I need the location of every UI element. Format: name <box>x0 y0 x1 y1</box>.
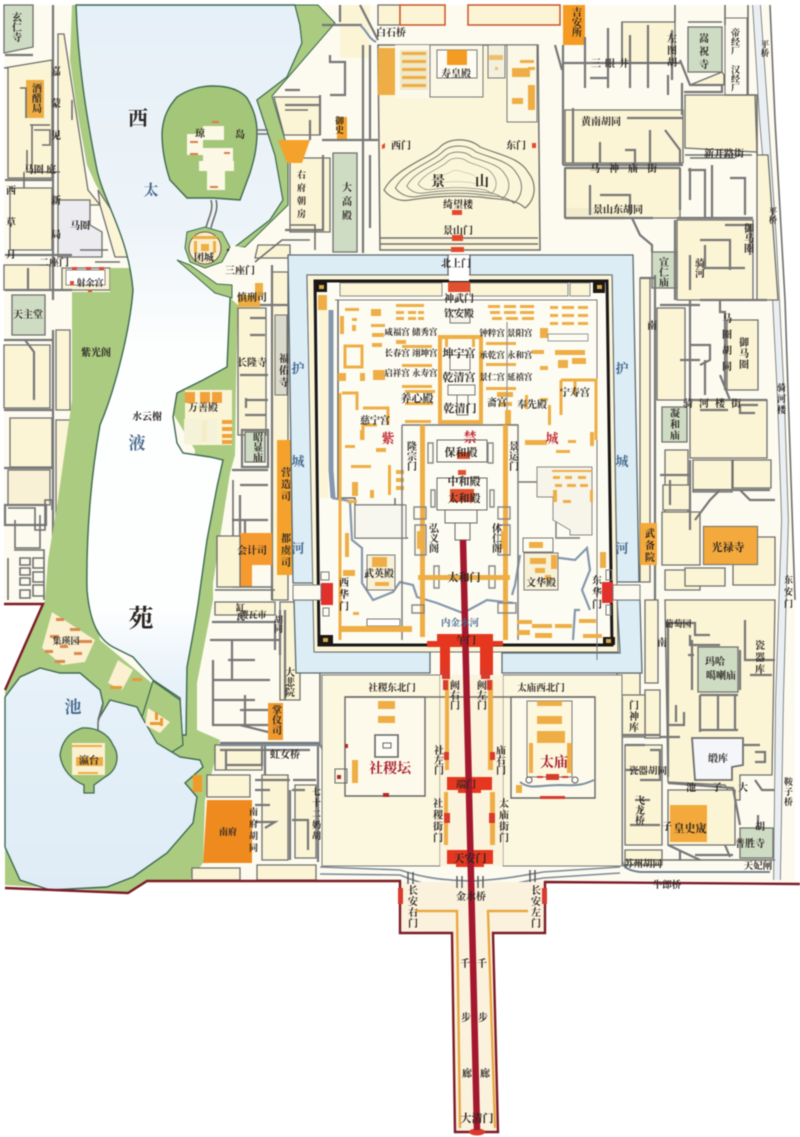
labels: north and west: 寿皇殿 <box>441 67 471 80</box>
palace wall <box>315 281 612 645</box>
south palace precinct <box>322 670 622 867</box>
labels: north and west: 福佑寺 <box>276 352 288 389</box>
labels: north and west: 玄仁寺 <box>10 11 22 42</box>
labels: east quarter: 汉经厂 <box>730 64 740 93</box>
labels: north and west: 御史 <box>334 115 344 135</box>
labels: east quarter: 骑河楼街 <box>683 397 747 410</box>
labels: south precinct: 社稷街门 <box>430 797 442 844</box>
labels: north and west: 马圈 <box>70 219 90 232</box>
labels: north and west: 大高殿 <box>340 181 352 224</box>
west city blocks <box>4 5 128 600</box>
labels: east quarter: 宣仁庙 <box>656 256 668 288</box>
labels: Forbidden City: 隆宗门 <box>404 440 416 472</box>
labels: lakes and moat: 护 <box>615 361 629 376</box>
palace interior <box>315 255 615 680</box>
labels: south precinct: 庙右门 <box>494 744 506 776</box>
labels: lakes and moat: 河 <box>615 541 629 556</box>
labels: south precinct: 端门 <box>456 778 476 791</box>
labels: Forbidden City: 承乾宫 永和宫 <box>479 350 533 360</box>
labels: north and west: 新局 <box>48 194 60 263</box>
labels: lakes and moat: 太 <box>143 182 159 199</box>
canal at Tiananmen <box>320 867 620 888</box>
Jiying garden and Yingtai islands <box>42 612 170 793</box>
labels: lakes and moat: 护 <box>291 361 305 376</box>
labels: Forbidden City: 乾清门 <box>444 401 476 415</box>
labels: south precinct: 太庙街门 <box>496 797 508 844</box>
labels: east quarter: 牛郎桥 <box>653 879 682 891</box>
labels: north and west: 虹女桥 <box>270 748 300 761</box>
labels: south precinct: 大清门 <box>460 1111 494 1125</box>
labels: north and west: 南府 <box>219 826 237 837</box>
labels: north and west: 七十二奶胡 <box>311 787 321 842</box>
labels: east quarter: 飞龙桥 <box>632 795 644 826</box>
green east bank strip and south shore <box>5 296 238 892</box>
labels: south precinct: 社稷坛 <box>369 760 412 777</box>
labels: north and west: 瀛台 <box>79 754 100 767</box>
south-east halls <box>537 467 592 535</box>
labels: Forbidden City: 城 <box>545 431 559 446</box>
labels: east quarter: 马神庙街 <box>590 162 666 175</box>
labels: south precinct: 步 <box>478 1011 488 1024</box>
labels: Forbidden City: 乾清宫 <box>442 370 476 384</box>
labels: east quarter: 左图胡 <box>664 32 676 69</box>
labels: north and west: 会计司 <box>237 544 267 557</box>
labels: Forbidden City: 钟粹宫 景阳宫 <box>479 328 533 338</box>
labels: east quarter: 帝经厂 <box>730 27 740 56</box>
labels: east quarter: 东安门 <box>782 574 793 611</box>
labels: north and west: 景山门 <box>443 224 473 237</box>
labels: north and west: 西草月 <box>4 184 16 281</box>
west and east flower gates <box>321 583 333 605</box>
moat road crossings <box>293 585 640 600</box>
labels: south precinct <box>368 679 568 1125</box>
corridors <box>444 680 495 845</box>
labels: north and west: 白石桥 <box>376 26 406 39</box>
labels: north and west: 绮望楼 <box>443 198 474 211</box>
labels: east quarter: 天妃闸 <box>744 860 773 872</box>
labels: north and west: 缸瓦 <box>235 602 245 622</box>
central axis north <box>450 310 470 323</box>
labels: Forbidden City: 西华门 <box>336 576 348 613</box>
labels: east quarter: 光禄寺 <box>712 540 744 554</box>
labels: north and west: 长隆寺 <box>237 356 267 369</box>
labels: Forbidden City: 启祥宫 永寿宫 <box>384 368 438 378</box>
labels: Forbidden City: 咸福宫 储秀宫 <box>384 327 438 337</box>
labels: south precinct: 廊 <box>462 1067 472 1080</box>
labels: east quarter: 葡萄园 <box>664 618 692 629</box>
labels: east quarter: 骑河楼 <box>776 382 786 416</box>
labels: east quarter: 武备院 <box>642 527 654 564</box>
west-of-moat blocks north <box>215 5 378 600</box>
labels: Forbidden City: 养心殿 <box>400 391 434 405</box>
labels: north and west: 缨瓦市 <box>239 609 267 620</box>
labels: east quarter: 南 <box>657 636 667 649</box>
labels: east quarter: 子 <box>662 821 672 833</box>
south-west blocks <box>192 602 323 880</box>
labels: north and west: 琼 <box>195 127 206 140</box>
labels: Forbidden City: 坤宁宫 <box>442 346 476 360</box>
labels: north and west: 天主堂 <box>13 308 43 321</box>
labels: Forbidden City: 东华门 <box>590 574 602 611</box>
Duan gate <box>447 777 492 793</box>
labels: north and west: 酒醋局 <box>30 82 42 114</box>
east city quarter <box>555 5 795 880</box>
labels: east quarter: 吉安所 <box>570 6 582 38</box>
green west bank main <box>5 268 185 750</box>
Wuying hall <box>367 555 395 590</box>
labels: north and west <box>4 11 526 855</box>
river <box>332 498 513 613</box>
labels: Forbidden City: 中和殿 <box>448 474 480 488</box>
labels: Forbidden City: 内金水河 <box>441 617 479 629</box>
labels: north and west: 营造司 <box>278 466 290 503</box>
labels: north and west: 万善殿 <box>188 401 218 414</box>
moat lower half <box>294 600 642 673</box>
labels: Forbidden City: 斋宫 <box>487 396 507 409</box>
labels: east quarter: 鞍子桥 <box>782 776 793 807</box>
labels: east quarter: 池子大 <box>686 781 764 794</box>
Wanshan hall compound <box>184 390 232 445</box>
labels: Forbidden City: 奉先殿 <box>517 398 547 411</box>
labels: Forbidden City: 神武门 <box>444 292 474 305</box>
labels: east quarter: 噶喇庙 <box>706 669 736 682</box>
labels: Forbidden City: 午门 <box>456 634 476 647</box>
labels: north and west: 西门 <box>391 139 411 152</box>
south lake (Nanhai) <box>5 668 203 890</box>
labels: north and west: 紫光阁 <box>81 346 111 359</box>
labels: east quarter: 御马圈 <box>742 222 754 254</box>
labels: north and west: 北上门 <box>441 257 471 270</box>
labels: Forbidden City: 景运门 <box>506 440 518 472</box>
labels: east quarter: 黄南胡同 <box>581 115 621 128</box>
labels: east quarter: 胡 <box>755 820 765 833</box>
labels: east quarter: 三眼井 <box>591 57 633 70</box>
labels: south precinct: 长安右门 <box>406 884 418 929</box>
labels: east quarter: 玛哈 <box>705 655 725 668</box>
labels: south precinct: 社稷东北门 <box>368 682 416 694</box>
labels: Forbidden City: 武英殿 <box>364 567 394 580</box>
islet in south lake bridge <box>142 681 183 752</box>
labels: east quarter: 缎库 <box>708 752 728 765</box>
labels: Forbidden City: 太和殿 <box>448 491 480 505</box>
labels: north and west: 三座门 <box>225 264 255 277</box>
Taimiao temple <box>511 697 595 798</box>
labels: south precinct: 廊 <box>480 1067 490 1080</box>
Jingshan park <box>378 45 540 252</box>
east bank green <box>235 5 335 247</box>
labels: lakes and moat <box>64 107 629 717</box>
labels: Forbidden City <box>336 292 602 647</box>
labels: north and west: 掌仪司 <box>270 704 282 735</box>
labels: lakes and moat: 苑 <box>128 605 154 633</box>
labels: east quarter: 普胜寺 <box>735 837 765 850</box>
labels: south precinct: 金水桥 <box>456 890 486 903</box>
palace inner ground <box>307 275 618 652</box>
upper lake (Taiye) <box>76 5 302 735</box>
labels: south precinct: 天安门 <box>454 851 486 865</box>
south-east quarter <box>617 600 775 872</box>
green west bank north strip <box>70 5 137 292</box>
meridian gate <box>427 634 503 680</box>
labels: east quarter: 皇史宬 <box>674 821 706 835</box>
labels: east quarter: 景山东胡同 <box>593 203 643 216</box>
labels: south precinct: 长安左门 <box>528 884 540 929</box>
labels: east quarter: 瓷器胡同 <box>629 765 667 777</box>
Wenhua hall <box>523 538 553 552</box>
labels: north and west: 射余宫 <box>76 277 104 288</box>
labels: lakes and moat: 池 <box>64 697 82 717</box>
labels: south precinct: 太庙西北门 <box>517 682 565 694</box>
south wall and T-shaped avenue <box>4 604 800 1136</box>
labels: east quarter: 南 <box>644 319 656 331</box>
labels: Forbidden City: 保和殿 <box>444 445 478 459</box>
labels: south precinct: 千 <box>477 957 487 970</box>
labels: north and west: 水云榭 <box>132 410 162 423</box>
Tuancheng peninsula <box>177 227 262 298</box>
labels: Forbidden City: 太和门 <box>448 570 480 584</box>
labels: north and west: 山 <box>475 174 489 190</box>
imperial axis road <box>463 540 477 1130</box>
Qiong island <box>162 86 268 228</box>
labels: north and west: 南府胡同 <box>248 806 258 855</box>
orange buildings north-east <box>486 305 594 453</box>
north walls top blocks <box>378 5 585 45</box>
labels: south precinct: 社左门 <box>432 744 444 776</box>
east canal <box>753 5 795 880</box>
labels: north and west: 慎刑司 <box>237 291 267 304</box>
labels: east quarter: 骑河 <box>692 257 704 279</box>
labels: north and west: 马圈 庭 <box>24 163 56 176</box>
labels: lakes and moat: 液 <box>128 434 146 453</box>
labels: Forbidden City: 弘义阁 <box>426 523 438 554</box>
three great halls court <box>402 425 580 640</box>
labels: south precinct: 步 <box>461 1011 471 1024</box>
labels: north and west: 景 <box>431 174 446 190</box>
orange buildings north-west <box>338 304 435 423</box>
Tiananmen <box>447 850 493 867</box>
labels: east quarter <box>570 6 793 891</box>
labels: Forbidden City: 长春宫 翊坤宫 <box>384 348 438 358</box>
labels: Forbidden City: 慈宁宫 <box>360 414 390 427</box>
labels: Forbidden City: 景仁宫 延禧宫 <box>479 372 533 382</box>
labels: east quarter: 凝和庙 <box>668 407 680 441</box>
labels: east quarter: 新开路街 <box>704 147 744 160</box>
labels: east quarter: 马圈胡同 <box>720 312 732 377</box>
labels: north and west: 昭显庙 <box>250 432 262 463</box>
labels: north and west: 二座门 <box>39 256 69 269</box>
labels: Forbidden City: 体仁阁 <box>490 522 502 554</box>
labels: north and west: 团城 <box>194 251 214 264</box>
labels: east quarter: 苏州胡同 <box>624 858 662 870</box>
labels: lakes and moat: 河 <box>291 541 305 556</box>
Forbidden City moat <box>288 255 639 583</box>
labels: south precinct: 阙左门 <box>474 679 486 711</box>
labels: Forbidden City: 紫 <box>381 431 395 446</box>
labels: east quarter: 嵩祝寺 <box>696 32 708 72</box>
labels: Forbidden City: 文华殿 <box>526 576 556 589</box>
labels: east quarter: 瓷器库 <box>752 639 764 676</box>
labels: south precinct: 千 <box>460 957 470 970</box>
labels: north and west: 岛 <box>235 128 245 141</box>
bridge gates <box>408 870 535 888</box>
labels: north and west: 右府朝房 <box>296 169 306 222</box>
labels: lakes and moat: 城 <box>615 454 629 469</box>
land base <box>4 5 795 893</box>
labels: north and west: 胡同 <box>273 614 283 634</box>
labels: south precinct: 太庙 <box>540 754 568 771</box>
Shejitan altar <box>345 697 425 796</box>
labels: north and west: 嘉蒙见 <box>48 65 60 162</box>
labels: north and west: 都虞司 <box>278 532 290 569</box>
labels: north and west: 集瑛园 <box>52 635 80 646</box>
labels: Forbidden City: 禁 <box>463 430 477 445</box>
labels: north and west: 东门 <box>506 139 526 152</box>
labels: east quarter: 御马圈 <box>736 336 748 370</box>
labels: north and west: 大悲院 <box>282 666 294 698</box>
labels: Forbidden City: 钦安殿 <box>444 307 474 320</box>
labels: east quarter: 平桥 <box>760 39 770 58</box>
labels: Forbidden City: 宁寿宫 <box>560 386 590 399</box>
labels: south precinct: 阙右门 <box>448 679 460 711</box>
labels: lakes and moat: 西 <box>128 107 148 130</box>
labels: east quarter: 平桥 <box>768 206 778 225</box>
labels: lakes and moat: 城 <box>291 454 305 469</box>
labels: east quarter: 门神库 <box>626 699 638 733</box>
